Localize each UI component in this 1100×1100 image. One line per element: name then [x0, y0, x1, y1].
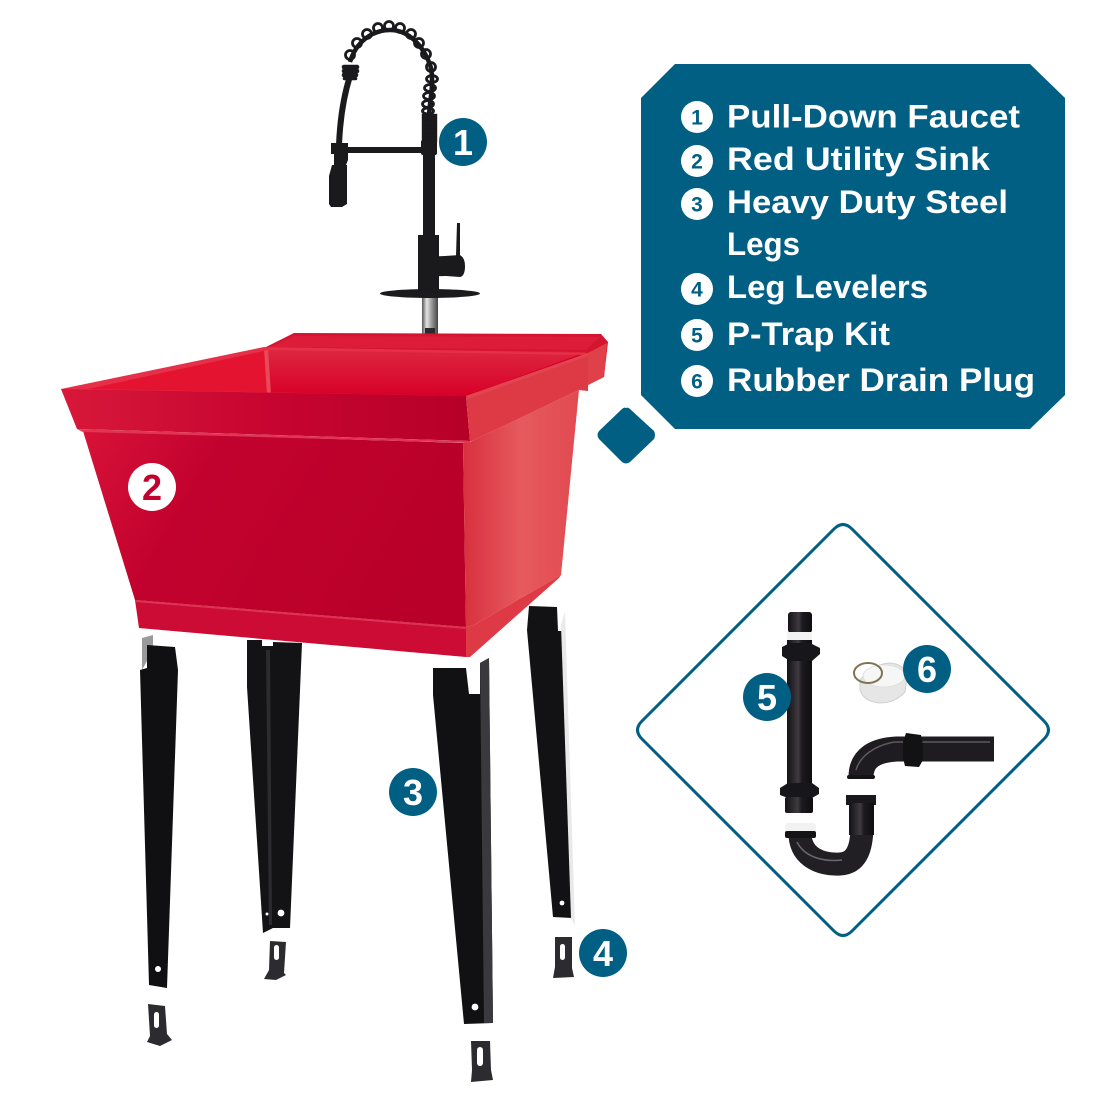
sink right side ledge — [588, 343, 607, 385]
number badge 6 — [903, 645, 951, 693]
item 3: 3 — [691, 194, 703, 216]
sink front rim — [61, 389, 470, 441]
sink right rim — [466, 353, 588, 441]
number badge 6: 6 — [917, 649, 937, 690]
elbow pipe — [847, 733, 994, 779]
sink front face — [83, 431, 466, 627]
item 3 — [681, 184, 1008, 262]
leg levelers — [147, 937, 574, 1082]
number badge 4: 4 — [593, 933, 613, 974]
sink inner left wall — [78, 348, 270, 393]
sink back ledge — [264, 333, 608, 385]
diamond outline frame — [638, 524, 1048, 936]
panel: parts list — [641, 64, 1065, 429]
item 1: Pull-Down Faucet — [727, 98, 1020, 134]
tailpiece pipe — [780, 612, 820, 813]
leg back left — [247, 640, 302, 933]
j-bend — [785, 795, 876, 864]
item 4: Leg Levelers — [727, 269, 928, 305]
item 6: 6 — [691, 370, 703, 394]
faucet body — [418, 140, 465, 293]
number badge 5: 5 — [757, 677, 777, 718]
item 5: 5 — [691, 324, 703, 348]
faucet — [329, 22, 480, 347]
item 5: P-Trap Kit — [727, 316, 890, 352]
item 4: 4 — [691, 278, 703, 302]
leveler front right — [471, 1041, 493, 1082]
number badge 3 — [389, 768, 437, 816]
leveler back right — [553, 937, 574, 978]
sink rim top edge — [61, 347, 588, 399]
spray head — [329, 143, 348, 207]
crossbar — [346, 147, 423, 153]
number badge 3: 3 — [403, 772, 423, 813]
faucet deck plate — [380, 289, 480, 298]
item 2: 2 — [691, 150, 703, 174]
item 2: Red Utility Sink — [727, 141, 990, 177]
p-trap kit — [780, 612, 994, 864]
sink — [61, 333, 608, 657]
drain plug — [854, 663, 907, 703]
number badge 1 — [439, 118, 487, 166]
small diamond accent — [598, 408, 655, 464]
sink inner back wall — [268, 348, 586, 396]
spray hose — [339, 76, 350, 145]
faucet supply pipe — [422, 297, 438, 347]
item 6: Rubber Drain Plug — [727, 362, 1035, 398]
item 1: 1 — [691, 106, 703, 130]
spring arc — [346, 22, 438, 115]
item 3: Heavy Duty Steel — [727, 184, 1008, 220]
number badge 2: 2 — [142, 467, 162, 508]
number badge 5 — [743, 673, 791, 721]
panel background — [641, 64, 1065, 429]
leg back right — [527, 606, 575, 926]
sink bottom band side — [466, 575, 561, 657]
leg front right — [433, 658, 493, 1024]
spring coil base — [422, 115, 437, 141]
sink bottom band front — [135, 600, 466, 657]
sink right face — [463, 390, 579, 627]
item 3: Legs — [727, 226, 800, 262]
leveler back left — [264, 941, 286, 980]
leg front left — [140, 635, 178, 988]
number badge 1: 1 — [453, 122, 473, 163]
hose coil — [342, 65, 359, 80]
number badge 4 — [579, 929, 627, 977]
leveler front left — [147, 1004, 172, 1046]
legs — [140, 606, 575, 1024]
number badge 2 — [128, 463, 176, 511]
sink interior base — [80, 348, 590, 398]
